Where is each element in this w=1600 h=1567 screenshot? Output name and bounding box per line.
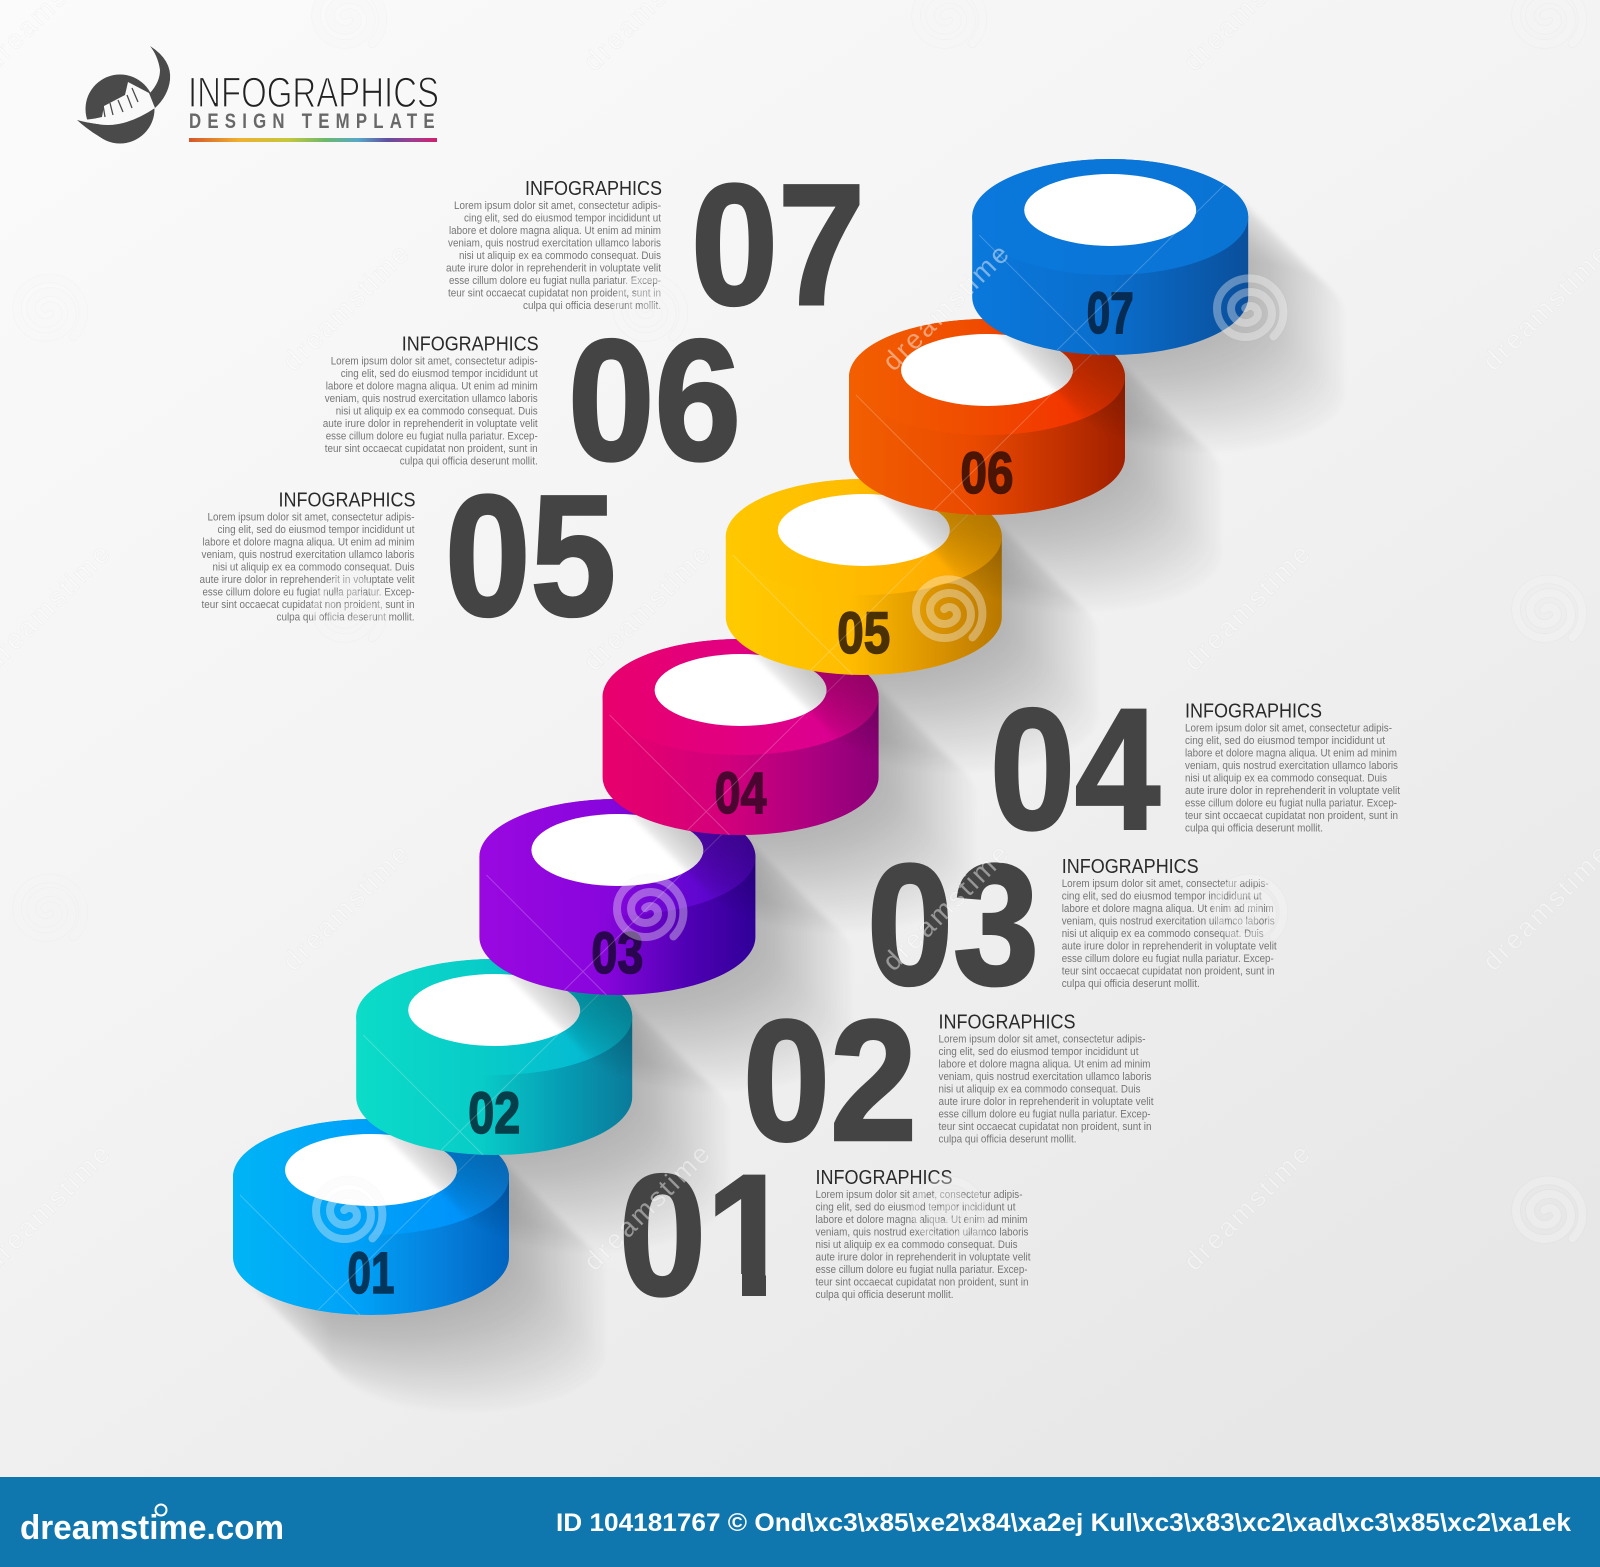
disc 05: 05 xyxy=(837,601,890,666)
big number 01: 01 xyxy=(619,1140,793,1332)
text block 07: nisi ut aliquip ex ea commodo consequat. Duis xyxy=(459,250,661,262)
footer logo: dreamstime.com xyxy=(20,1509,284,1547)
text block 06: aute irure dolor in reprehenderit in voluptate velit xyxy=(323,418,538,430)
big number 04: 04 xyxy=(990,674,1160,866)
text block 02: esse cillum dolore eu fugiat nulla pariatur. Excep- xyxy=(938,1108,1151,1120)
text block 05: INFOGRAPHICS xyxy=(278,489,416,511)
text block 05: teur sint occaecat cupidatat non proident, sunt in xyxy=(202,599,415,611)
text block 03: veniam, quis nostrud exercitation ullamco laboris xyxy=(1062,916,1275,928)
text block 01: INFOGRAPHICS xyxy=(816,1167,952,1189)
text block 02: Lorem ipsum dolor sit amet, consectetur adipis- xyxy=(938,1034,1146,1046)
text block 07 xyxy=(446,178,662,312)
text block 05: cing elit, sed do eiusmod tempor incididunt ut xyxy=(218,524,415,536)
text block 04: teur sint occaecat cupidatat non proident, sunt in xyxy=(1185,810,1398,822)
text block 07: cing elit, sed do eiusmod tempor incididunt ut xyxy=(464,212,661,224)
text block 02: nisi ut aliquip ex ea commodo consequat. Duis xyxy=(938,1084,1140,1096)
big number 03: 03 xyxy=(867,829,1039,1021)
text block 01: culpa qui officia deserunt mollit. xyxy=(816,1289,954,1301)
text block 04: esse cillum dolore eu fugiat nulla pariatur. Excep- xyxy=(1185,798,1397,810)
text block 06: nisi ut aliquip ex ea commodo consequat. Duis xyxy=(336,406,538,418)
text block 07: Lorem ipsum dolor sit amet, consectetur adipis- xyxy=(454,200,661,212)
text block 02: INFOGRAPHICS xyxy=(938,1012,1076,1034)
text block 01: aute irure dolor in reprehenderit in voluptate velit xyxy=(816,1252,1031,1264)
text block 01: teur sint occaecat cupidatat non proident, sunt in xyxy=(816,1276,1029,1288)
watermark text: dreamstime xyxy=(877,239,1015,377)
text block 06: teur sint occaecat cupidatat non proident, sunt in xyxy=(325,443,538,455)
text block 06: veniam, quis nostrud exercitation ullamco laboris xyxy=(325,393,538,405)
text block 01: veniam, quis nostrud exercitation ullamco laboris xyxy=(816,1226,1028,1238)
text block 05 xyxy=(200,489,416,623)
footer bar xyxy=(0,1477,1600,1567)
rainbow bar xyxy=(189,138,437,142)
text block 06: INFOGRAPHICS xyxy=(402,334,539,356)
text block 01: nisi ut aliquip ex ea commodo consequat. Duis xyxy=(816,1239,1018,1251)
logo title: INFOGRAPHICS xyxy=(188,69,439,117)
text block 05: labore et dolore magna aliqua. Ut enim ad minim xyxy=(202,536,415,548)
text block 01: labore et dolore magna aliqua. Ut enim ad minim xyxy=(816,1214,1028,1226)
text block 04 xyxy=(1185,700,1400,834)
text block 01 xyxy=(816,1167,1031,1301)
watermark text: dreamstime xyxy=(877,839,1015,977)
text block 02: aute irure dolor in reprehenderit in voluptate velit xyxy=(938,1096,1154,1108)
text block 05: esse cillum dolore eu fugiat nulla pariatur. Excep- xyxy=(202,586,415,598)
text block 04: Lorem ipsum dolor sit amet, consectetur adipis- xyxy=(1185,722,1392,734)
disc 02: 02 xyxy=(468,1081,520,1146)
text block 06: labore et dolore magna aliqua. Ut enim ad minim xyxy=(326,381,538,393)
text block 07: teur sint occaecat cupidatat non proident, sunt in xyxy=(448,288,661,300)
text block 03: nisi ut aliquip ex ea commodo consequat. Duis xyxy=(1062,928,1264,940)
big number 05: 05 xyxy=(445,460,616,652)
logo subtitle: DESIGN TEMPLATE xyxy=(189,110,435,134)
text block 01: Lorem ipsum dolor sit amet, consectetur adipis- xyxy=(816,1189,1023,1201)
text block 03: Lorem ipsum dolor sit amet, consectetur adipis- xyxy=(1062,878,1269,890)
text block 04: nisi ut aliquip ex ea commodo consequat. Duis xyxy=(1185,772,1387,784)
disc 03 xyxy=(479,799,851,1091)
disc 02 xyxy=(356,959,728,1251)
text block 03 xyxy=(1062,856,1277,990)
text block 06: Lorem ipsum dolor sit amet, consectetur adipis- xyxy=(331,356,538,368)
text block 07: aute irure dolor in reprehenderit in voluptate velit xyxy=(446,262,661,274)
text block 02: veniam, quis nostrud exercitation ullamco laboris xyxy=(938,1071,1152,1083)
disc 01 xyxy=(233,1119,605,1411)
disc 03: 03 xyxy=(591,921,643,986)
text block 04: INFOGRAPHICS xyxy=(1185,700,1322,722)
text block 07: veniam, quis nostrud exercitation ullamco laboris xyxy=(448,238,661,250)
text block 01: esse cillum dolore eu fugiat nulla pariatur. Excep- xyxy=(816,1264,1028,1276)
disc 04: 04 xyxy=(715,761,767,826)
text block 04: culpa qui officia deserunt mollit. xyxy=(1185,822,1323,834)
disc 06 xyxy=(849,319,1221,611)
disc 04 xyxy=(603,639,975,931)
disc 05 xyxy=(726,479,1098,771)
logo: infographics design template xyxy=(77,46,439,144)
big number 02: 02 xyxy=(743,985,917,1177)
text block 06: esse cillum dolore eu fugiat nulla pariatur. Excep- xyxy=(326,431,538,443)
watermark spirals xyxy=(5,0,1596,1259)
text block 05: culpa qui officia deserunt mollit. xyxy=(276,611,414,623)
text block 06 xyxy=(323,334,539,468)
watermark text: dreamstime xyxy=(1178,1139,1316,1277)
logo mark xyxy=(77,46,170,144)
disc 07: 07 xyxy=(1087,281,1134,346)
text block 03: esse cillum dolore eu fugiat nulla pariatur. Excep- xyxy=(1062,953,1274,965)
text block 02: teur sint occaecat cupidatat non proident, sunt in xyxy=(938,1121,1152,1133)
big number 06: 06 xyxy=(568,304,741,496)
text block 04: cing elit, sed do eiusmod tempor incididunt ut xyxy=(1185,735,1385,747)
text block 06: culpa qui officia deserunt mollit. xyxy=(400,456,538,468)
text block 04: labore et dolore magna aliqua. Ut enim ad minim xyxy=(1185,748,1397,760)
text block 07: culpa qui officia deserunt mollit. xyxy=(523,300,661,312)
text block 01: cing elit, sed do eiusmod tempor incididunt ut xyxy=(816,1202,1016,1214)
text block 06: cing elit, sed do eiusmod tempor incididunt ut xyxy=(341,368,538,380)
text block 07: INFOGRAPHICS xyxy=(525,178,662,200)
text block 02 xyxy=(938,1012,1154,1146)
disc 01: 01 xyxy=(348,1241,394,1306)
text block 03: INFOGRAPHICS xyxy=(1062,856,1199,878)
text block 03: labore et dolore magna aliqua. Ut enim ad minim xyxy=(1062,903,1274,915)
text block 07: esse cillum dolore eu fugiat nulla pariatur. Excep- xyxy=(449,275,661,287)
text block 05: veniam, quis nostrud exercitation ullamco laboris xyxy=(202,549,414,561)
watermark text: dreamstime xyxy=(578,1139,716,1277)
text block 04: aute irure dolor in reprehenderit in voluptate velit xyxy=(1185,785,1400,797)
text block 03: aute irure dolor in reprehenderit in voluptate velit xyxy=(1062,940,1277,952)
text block 04: veniam, quis nostrud exercitation ullamco laboris xyxy=(1185,760,1398,772)
text block 05: nisi ut aliquip ex ea commodo consequat. Duis xyxy=(212,561,414,573)
text block 03: cing elit, sed do eiusmod tempor incididunt ut xyxy=(1062,890,1262,902)
text block 02: culpa qui officia deserunt mollit. xyxy=(938,1134,1076,1146)
footer credit: ID 104181767 © Ond\xc3\x85\xe2\x84\xa2ej Kul\xc3\x83\xc2\xad\xc3\x85\xc2\xa1ek xyxy=(556,1509,1571,1537)
text block 03: culpa qui officia deserunt mollit. xyxy=(1062,978,1200,990)
text block 03: teur sint occaecat cupidatat non proident, sunt in xyxy=(1062,966,1275,978)
text block 07: labore et dolore magna aliqua. Ut enim ad minim xyxy=(449,225,661,237)
watermark text: dreamstime xyxy=(277,239,415,377)
disc 07 xyxy=(972,159,1344,451)
watermark text: dreamstime xyxy=(1178,539,1316,677)
big number 07: 07 xyxy=(691,149,865,341)
disc 06: 06 xyxy=(960,441,1014,506)
watermark text: dreamstime xyxy=(277,839,415,977)
watermark text: dreamstime xyxy=(578,539,716,677)
text block 05: Lorem ipsum dolor sit amet, consectetur adipis- xyxy=(208,511,415,523)
text block 02: labore et dolore magna aliqua. Ut enim ad minim xyxy=(938,1058,1151,1070)
text block 02: cing elit, sed do eiusmod tempor incididunt ut xyxy=(938,1046,1139,1058)
text block 05: aute irure dolor in reprehenderit in voluptate velit xyxy=(200,574,415,586)
